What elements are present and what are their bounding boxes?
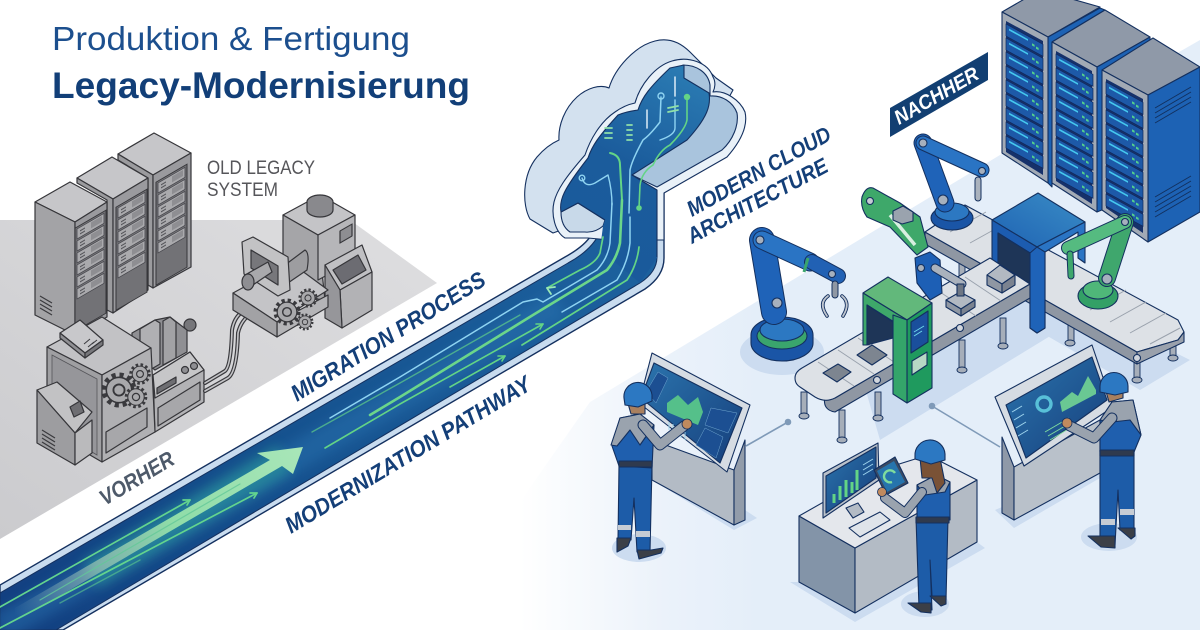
- control cabinet: [325, 245, 372, 328]
- modern server racks: [1002, 0, 1200, 242]
- legacy rack 2: [77, 157, 148, 313]
- modern rack C: [1102, 38, 1200, 242]
- flat part 1: [857, 345, 887, 365]
- conveyor belt rear: [925, 205, 1184, 383]
- legacy rack 3: [118, 133, 191, 288]
- screen frame: [995, 345, 1113, 466]
- modern factory floor: [430, 40, 1200, 630]
- base: [277, 295, 328, 337]
- flat part 2: [823, 364, 851, 382]
- modern rack A: [1002, 0, 1105, 187]
- grey cube: [987, 265, 1015, 293]
- screen frame: [639, 353, 750, 472]
- stream: lower arrow: [450, 356, 505, 387]
- worker legs: [618, 465, 652, 552]
- blue gantry: [992, 193, 1085, 333]
- tablet: [874, 457, 908, 495]
- cables: [205, 312, 252, 391]
- legacy label: [207, 158, 315, 201]
- rear conveyor legs: [959, 245, 1178, 383]
- robot arm blue top: [919, 139, 986, 230]
- worker right: [1062, 372, 1141, 551]
- worker helmet: [915, 440, 945, 464]
- dashboard panels: [646, 372, 737, 458]
- title block: [52, 20, 470, 106]
- stream: thick green: [370, 200, 622, 415]
- cloud rim: [553, 59, 746, 240]
- monitor: [823, 443, 879, 518]
- legacy label: OLD LEGACY: [207, 158, 315, 179]
- nachher badge: NACHHER: [890, 63, 983, 129]
- modernization label: MODERNIZATION PATHWAY: [280, 370, 537, 538]
- small cabinet: [37, 382, 92, 465]
- green arm: [862, 188, 928, 255]
- front gantry pillar: [1030, 247, 1045, 333]
- cloud floor edges: [561, 65, 710, 257]
- cloud: [312, 40, 746, 448]
- worker legs: [916, 518, 948, 610]
- desk: [790, 443, 985, 622]
- title line 2: Legacy-Modernisierung: [52, 65, 470, 106]
- robot arm blue left: [751, 236, 847, 361]
- worker arm: [643, 425, 684, 445]
- cloud extrusion: [525, 40, 733, 233]
- pathway surface: [0, 192, 657, 630]
- band centre sheen: [0, 304, 560, 628]
- worker torso: [1100, 400, 1141, 452]
- grey link: [935, 268, 962, 284]
- floor shadows: [740, 285, 1190, 440]
- worker torso: [612, 414, 654, 468]
- vent box: [60, 320, 103, 358]
- stream: light blue right: [562, 217, 630, 312]
- legacy machine 2: [233, 195, 372, 337]
- cloud inner wall: [632, 65, 737, 187]
- worker helmet: [624, 382, 652, 407]
- worker arm: [1070, 418, 1112, 438]
- dashboard chart: [667, 395, 703, 425]
- legacy floor: [0, 220, 437, 539]
- legacy label: SYSTEM: [207, 180, 278, 201]
- worker helmet: [1100, 372, 1128, 395]
- pathway outer border: [0, 190, 664, 630]
- stream: green right: [522, 247, 639, 345]
- kiosk left: [639, 353, 757, 530]
- modern rack B: [1052, 10, 1150, 212]
- stream: faded: [312, 315, 520, 432]
- connector lines: [746, 404, 1000, 447]
- title line 1: Produktion & Fertigung: [52, 20, 410, 57]
- green gantry tower: [863, 277, 932, 403]
- screen: [1006, 357, 1107, 458]
- stream: light blue: [330, 203, 612, 418]
- arrow glow: [90, 458, 285, 575]
- kiosk right: [995, 345, 1113, 528]
- main block: [47, 317, 151, 375]
- lower band lines: [0, 484, 257, 628]
- big green arrow: [15, 447, 303, 622]
- cube under tool: [946, 292, 975, 316]
- blue pillar: [915, 252, 942, 300]
- robot arm center: [862, 188, 964, 300]
- tower: [283, 195, 355, 300]
- legacy server racks: [35, 133, 191, 335]
- migration label: MIGRATION PROCESS: [286, 266, 491, 406]
- worker center: [878, 440, 950, 617]
- control module: [153, 352, 204, 432]
- grey block: [893, 206, 913, 224]
- worker arm: [885, 492, 922, 513]
- gears: [104, 365, 149, 406]
- access plate: [106, 408, 147, 453]
- stream: mid arrow: [325, 324, 543, 448]
- worker left: [611, 382, 692, 562]
- conveyor belt front: [795, 247, 1045, 443]
- cloud wall left: [561, 203, 605, 232]
- cloud architecture label: MODERN CLOUD: [682, 121, 835, 221]
- dashboard chart: [1060, 376, 1096, 412]
- cloud architecture label: ARCHITECTURE: [682, 153, 833, 249]
- gears: [276, 290, 316, 329]
- cloud circuit floor: [561, 65, 710, 283]
- screen: [641, 363, 742, 463]
- vorher label: VORHER: [95, 446, 179, 510]
- stream lines into pathway: [312, 200, 639, 448]
- boxes on belt: [823, 265, 1015, 382]
- pathway band: [0, 190, 664, 630]
- ring frame and cylinder: [242, 237, 308, 296]
- front conveyor legs: [799, 318, 1008, 443]
- robot arm green right: [1068, 218, 1128, 309]
- worker torso: [917, 475, 950, 520]
- motor drum: [132, 317, 196, 371]
- worker legs: [1100, 450, 1134, 545]
- keyboard: [849, 512, 890, 537]
- cloud circuit traces: [579, 77, 690, 213]
- stream: green arrow: [547, 237, 603, 288]
- legacy rack 1: [35, 182, 107, 335]
- legacy machine 1: [37, 317, 204, 465]
